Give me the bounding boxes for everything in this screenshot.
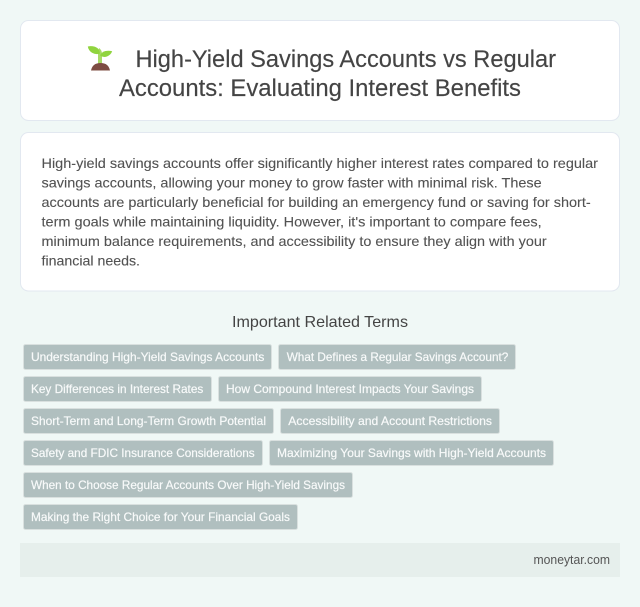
title text: High-Yield Savings Accounts vs Regular: [136, 46, 556, 73]
tag: right choice: [24, 504, 298, 530]
description text: savings accounts, allowing your money to grow faster with minimal risk. These: [42, 174, 542, 190]
tag: fdic: Safety and FDIC Insurance Considerations: [31, 446, 255, 460]
description text: [42, 155, 598, 268]
tag: compound interest: How Compound Interest Impacts Your Savings: [226, 382, 474, 396]
heading: important related terms: Important Related Terms: [232, 314, 408, 331]
tag: key differences: Key Differences in Interest Rates: [31, 382, 203, 396]
title text: Accounts: Evaluating Interest Benefits: [119, 75, 521, 102]
panel: description: [20, 132, 620, 291]
tag: maximizing savings: [270, 440, 554, 466]
tag: fdic: [24, 440, 262, 466]
tag: when to choose regular: [24, 472, 352, 498]
tag: regular savings account: What Defines a Regular Savings Account?: [287, 350, 509, 364]
tag: key differences: [24, 376, 212, 402]
tag: understanding high-yield: Understanding High-Yield Savings Accounts: [31, 350, 264, 364]
icon: sprout: [88, 46, 112, 70]
description text: High-yield savings accounts offer significantly higher interest rates compared to regular: [42, 155, 598, 171]
tag: compound interest: [218, 376, 482, 402]
description text: accounts are particularly beneficial for building an emergency fund or saving for short-: [42, 194, 591, 210]
tag: growth potential: Short-Term and Long-Term Growth Potential: [31, 414, 266, 428]
tag: when to choose regular: When to Choose Regular Accounts Over High-Yield Savings: [31, 478, 345, 492]
tag: understanding high-yield: [24, 344, 272, 370]
tag list: [24, 344, 554, 530]
tag: maximizing savings: Maximizing Your Savings with High-Yield Accounts: [277, 446, 546, 460]
title text: [119, 46, 556, 102]
tag: accessibility: [280, 408, 500, 434]
description text: minimum balance requirements, and accessibility to ensure they align with your: [42, 233, 547, 249]
tag: regular savings account: [278, 344, 516, 370]
description text: financial needs.: [42, 252, 140, 268]
description text: term goals while maintaining liquidity. However, it's important to compare fees,: [42, 214, 542, 230]
tag: growth potential: [24, 408, 274, 434]
footer text: moneytar.com: [534, 553, 610, 567]
footer: [20, 543, 620, 577]
panel: title card: [20, 20, 620, 120]
tag: right choice: Making the Right Choice for Your Financial Goals: [31, 510, 290, 524]
tag: accessibility: Accessibility and Account Restrictions: [288, 414, 492, 428]
